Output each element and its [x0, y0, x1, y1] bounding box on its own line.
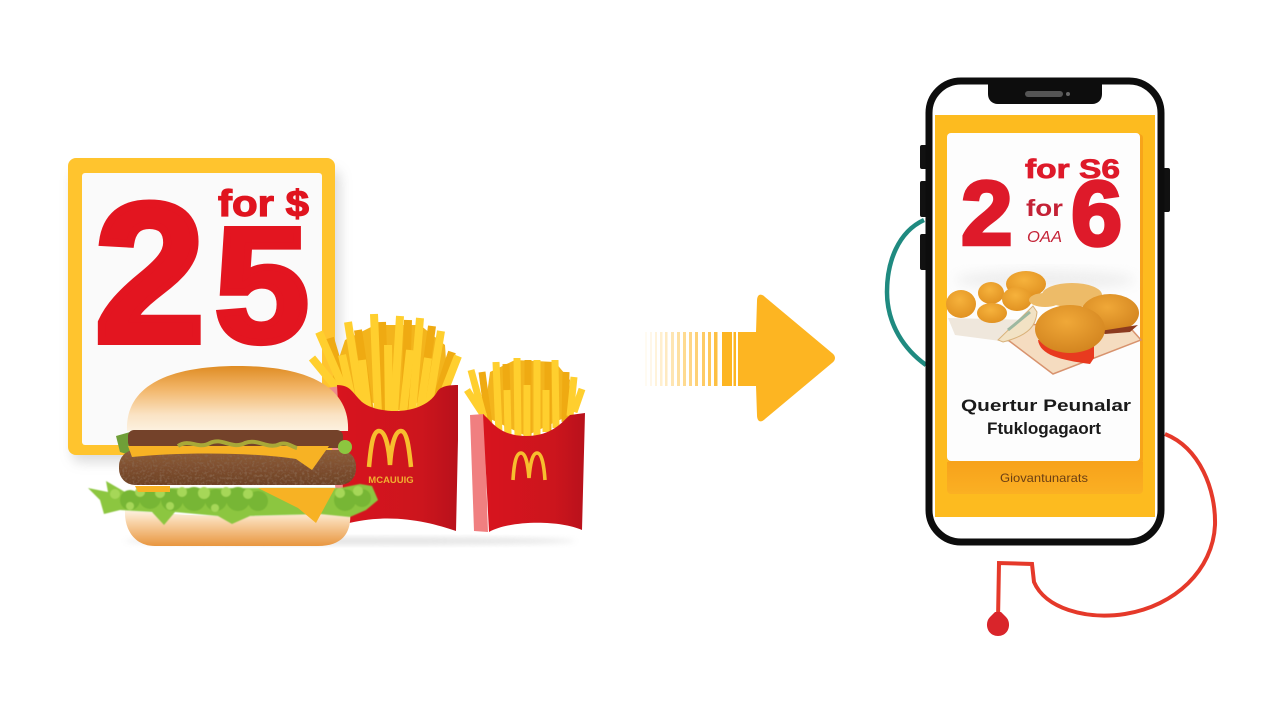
panel: offer card 2 for $5: [68, 158, 340, 462]
nuggets: [946, 271, 1102, 323]
phone body: [929, 81, 1161, 542]
upper cheese: [128, 446, 329, 470]
main patty: [1035, 305, 1105, 353]
tomato: [1038, 340, 1094, 364]
arrow: [645, 295, 835, 421]
icon: burger: [88, 366, 378, 546]
phone: [920, 81, 1170, 542]
green leaf left: [116, 432, 130, 455]
speaker: [1025, 91, 1063, 97]
food shadow: [125, 537, 575, 545]
heading: for S6: for S6: [1025, 154, 1120, 184]
small text: for: for: [1026, 195, 1063, 221]
top bun: [127, 366, 348, 431]
bottom band: [947, 462, 1143, 494]
bottom bun: [125, 510, 350, 546]
number: 5: 5: [215, 195, 309, 376]
small text: OAA: OAA: [1027, 229, 1062, 246]
side buttons: [920, 145, 1170, 270]
label on box: MCAUUIG: [368, 475, 414, 486]
second patty: [1081, 294, 1139, 332]
number: 2: 2: [95, 163, 205, 383]
icon: golden arches large: [369, 431, 411, 467]
cable: red: [987, 434, 1215, 636]
top patty: [128, 430, 343, 448]
icon: large fries: [312, 314, 458, 531]
lettuce: [88, 481, 378, 525]
food illustration: [946, 270, 1141, 374]
caption line 2: Ftuklogagaort: [987, 419, 1101, 438]
offer card: [946, 133, 1143, 464]
band text: Giovantunarats: [1000, 471, 1088, 485]
large fries box: [327, 385, 458, 531]
pickle right: [338, 440, 352, 454]
small fries box: [470, 413, 585, 532]
cable: teal: [887, 220, 926, 365]
wrapped item: [998, 306, 1037, 342]
paper: [948, 318, 1040, 345]
text block: [961, 396, 1131, 438]
screen offer panel: [935, 115, 1155, 517]
number: 2: 2: [961, 163, 1013, 264]
main patty: [119, 450, 356, 485]
cable plug: [987, 612, 1009, 636]
icon: small fries: [467, 358, 585, 532]
icon: golden arches small: [513, 453, 545, 480]
notch: [988, 84, 1102, 104]
caption line 1: Quertur Peunalar: [961, 396, 1131, 415]
heading: for $: for $: [218, 183, 309, 224]
relish: [178, 441, 297, 448]
lower cheese: [258, 488, 335, 523]
number: 6: 6: [1071, 163, 1122, 265]
